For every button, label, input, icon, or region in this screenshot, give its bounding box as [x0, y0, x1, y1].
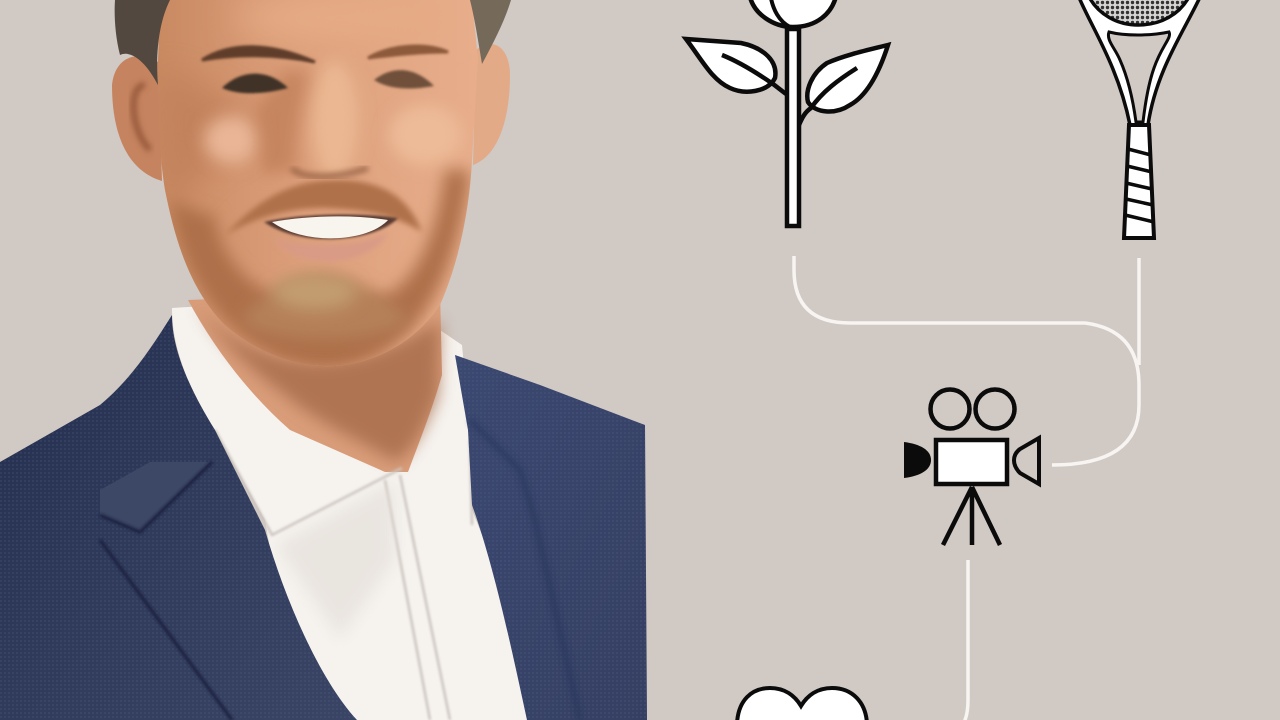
camera body	[936, 440, 1007, 484]
icon: film camera	[904, 390, 1039, 545]
right leaf	[807, 45, 888, 111]
connector: camera to heart	[963, 560, 968, 720]
racket frame	[1078, 0, 1201, 125]
tripod	[943, 487, 1000, 545]
left hair	[115, 0, 170, 85]
right lapel shading	[470, 420, 580, 720]
left eye	[222, 74, 288, 93]
mouth dark	[264, 215, 398, 239]
right film reel	[976, 390, 1014, 428]
connector: rose to camera	[794, 256, 1139, 465]
right leaf vein	[799, 68, 857, 125]
lower lip	[272, 232, 388, 261]
connector: racket to camera	[1137, 258, 1141, 365]
neck shadow	[195, 305, 440, 462]
left film reel	[930, 390, 970, 428]
shirt	[172, 300, 527, 720]
right hair	[470, 0, 511, 64]
right ear	[473, 44, 510, 165]
suit right side	[455, 355, 647, 720]
collar shadow on chest	[275, 480, 395, 640]
left eyebrow	[202, 47, 315, 62]
racket throat opening	[1108, 32, 1170, 122]
racket strings	[1088, 0, 1190, 25]
suit left side	[0, 315, 357, 720]
shirt collar folds	[215, 430, 472, 720]
portrait photo of smiling man	[0, 0, 647, 720]
suit right texture	[455, 355, 647, 720]
suit left texture	[0, 315, 357, 720]
left leaf	[686, 39, 775, 92]
face shading	[160, 0, 470, 370]
left lapel lines	[100, 462, 232, 720]
left leaf vein	[722, 55, 786, 94]
nose shadow	[292, 168, 368, 176]
left ear inner	[134, 85, 150, 150]
right eye	[374, 70, 434, 88]
face	[158, 0, 478, 366]
connector lines	[794, 256, 1139, 720]
left ear	[112, 56, 162, 181]
icon: rose	[686, 0, 888, 226]
teeth	[272, 216, 388, 238]
rose stem	[787, 29, 799, 226]
racket grip	[1124, 125, 1154, 238]
camera lens	[1014, 438, 1039, 484]
icon: tennis racket	[1078, 0, 1201, 238]
neck	[188, 290, 442, 472]
rose flower	[749, 0, 837, 27]
camera lamp	[904, 442, 931, 478]
icon: heart	[737, 688, 867, 720]
left lapel highlight	[100, 462, 210, 532]
rose petal line	[770, 0, 790, 27]
grip wraps	[1125, 149, 1154, 222]
right eyebrow	[368, 46, 448, 58]
